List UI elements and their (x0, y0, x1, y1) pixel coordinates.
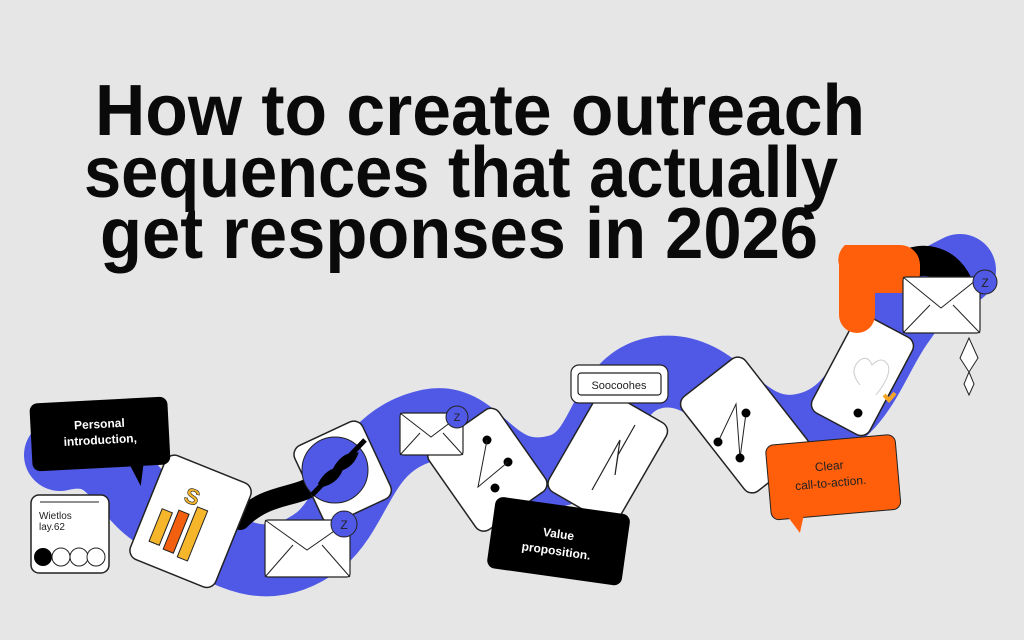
tile: zigzag (677, 353, 813, 497)
title: How to create outreach (95, 71, 865, 151)
orange L shape (838, 245, 920, 333)
sparkle (960, 338, 978, 395)
card: progress (31, 495, 109, 573)
bubble: clear call-to-action: Clear (814, 458, 844, 474)
title: sequences that actually (84, 133, 838, 213)
envelope lower: Z (340, 518, 348, 532)
bubble: clear call-to-action (765, 434, 903, 535)
label: Soocoohes (571, 365, 668, 403)
bubble: clear call-to-action: call-to-action. (795, 473, 867, 493)
envelope middle (400, 406, 468, 455)
bubble: personal introduction: introduction, (63, 431, 137, 449)
bubble: personal introduction (29, 396, 172, 492)
tile: bar chart: S (181, 482, 204, 511)
title: get responses in 2026 (100, 194, 818, 274)
label: value proposition: proposition. (521, 539, 591, 563)
envelope middle: Z (454, 412, 461, 424)
envelope top right (903, 270, 997, 333)
card: progress: Wietlos (39, 511, 72, 522)
tile: feather circle (291, 418, 395, 527)
tile: dots (424, 404, 551, 535)
label: Soocoohes: Soocoohes (591, 380, 647, 392)
label: value proposition: Value (542, 525, 575, 543)
tile: NF (544, 388, 671, 527)
envelope top right: Z (981, 276, 989, 290)
bubble: personal introduction: Personal (74, 416, 125, 432)
tile: bar chart (127, 452, 254, 590)
ribbon path (60, 261, 960, 560)
label: value proposition (486, 496, 631, 586)
tile: heart (808, 311, 917, 439)
envelope lower (265, 511, 357, 577)
title (84, 71, 865, 274)
card: progress: lay.62 (39, 522, 65, 533)
